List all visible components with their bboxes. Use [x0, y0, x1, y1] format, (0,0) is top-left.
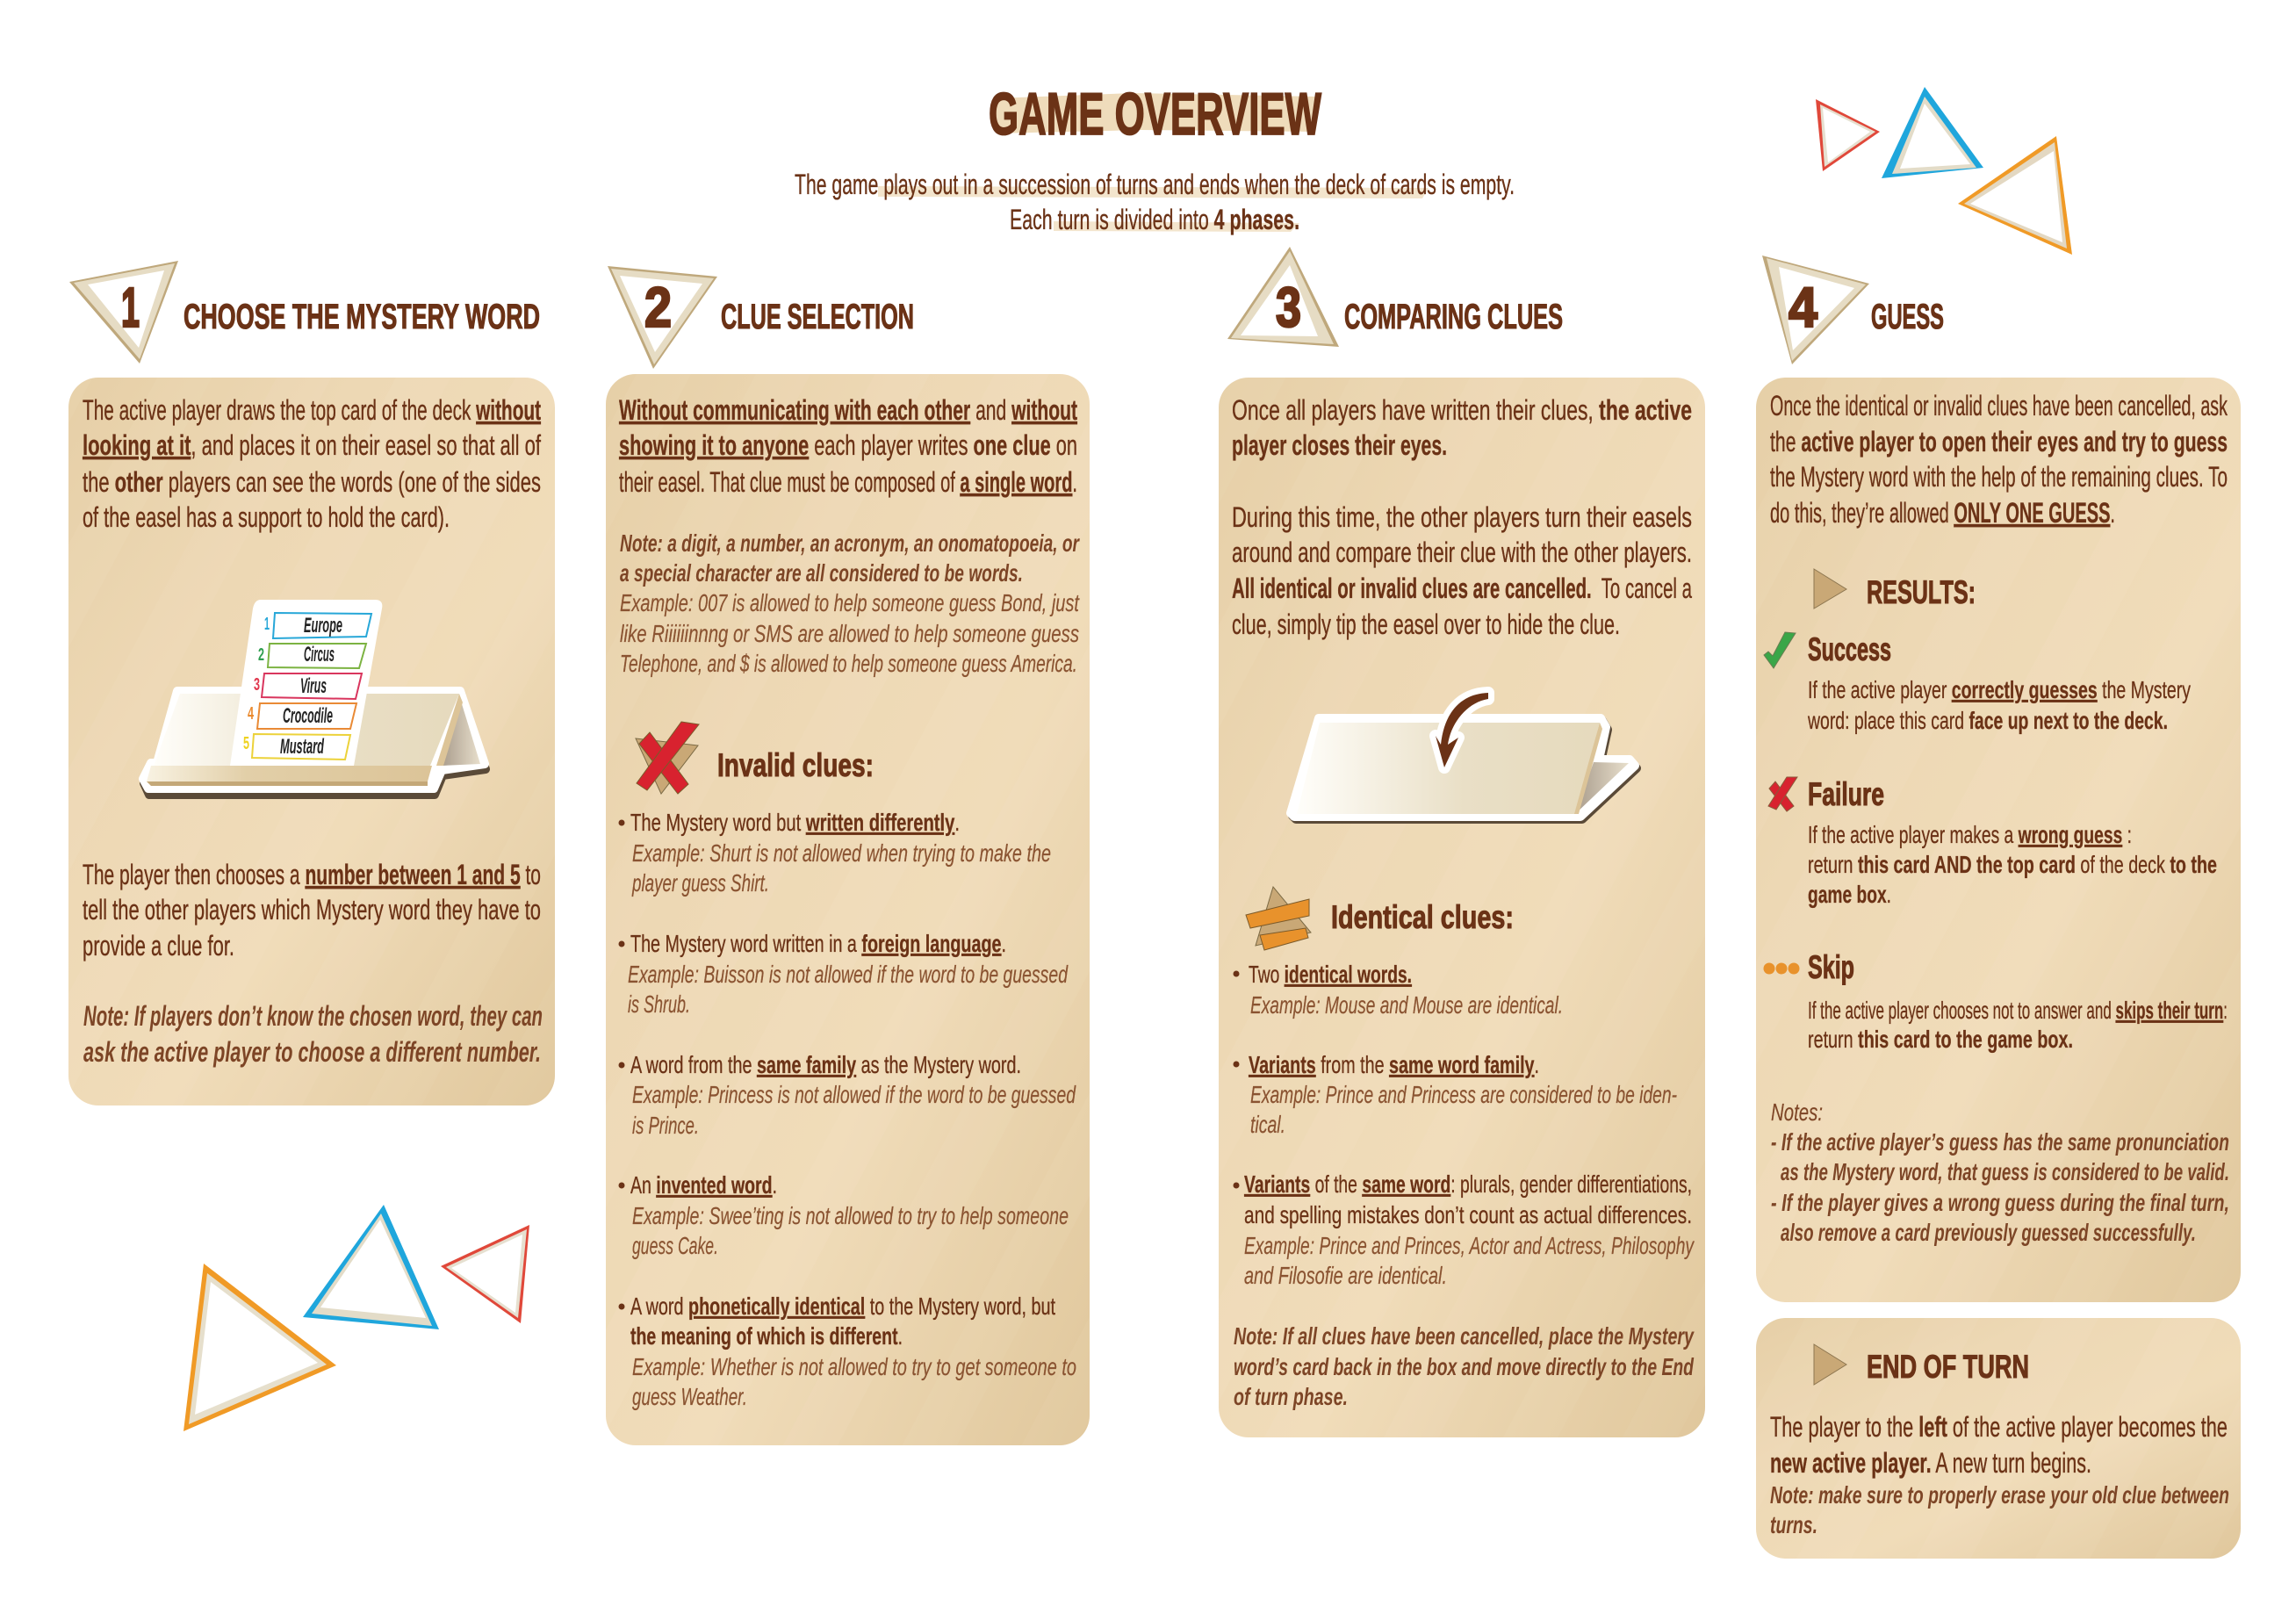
list: invalid clue types: Example: Princess is not allowed if the word to be guessed — [632, 1081, 1076, 1108]
list: invalid clue types: Example: Whether is not allowed to try to get someone to — [632, 1353, 1076, 1380]
list: identical clue types: Variants of the same word: plurals, gender differentiations, — [1244, 1170, 1692, 1198]
list: invalid clue types: A word from the same family as the Mystery word. — [630, 1051, 1021, 1078]
number paragraph — [83, 859, 541, 961]
note and example: Example: 007 is allowed to help someone guess Bond, just — [620, 589, 1080, 616]
step 1 heading — [69, 261, 540, 364]
heading: clue selection: CLUE SELECTION — [721, 298, 914, 336]
note and example: like Riiiiiinnng or SMS are allowed to help someone guess — [620, 620, 1079, 647]
note: ask the active player to choose a different number. — [83, 1036, 541, 1068]
step 2 heading — [608, 266, 914, 369]
result: failure: game box. — [1808, 881, 1891, 908]
result: skip: Skip — [1808, 949, 1854, 985]
result: success: Success — [1808, 631, 1891, 667]
illustration: easel with card: Virus — [300, 674, 327, 698]
intro paragraph: of the easel has a support to hold the card). — [83, 501, 450, 533]
illustration: easel with card: Europe — [304, 614, 342, 637]
intro paragraph: looking at it, and places it on their easel so that all of — [83, 429, 541, 461]
result: success: If the active player correctly guesses the Mystery — [1808, 676, 2191, 703]
illustration: easel with card: Circus — [304, 643, 335, 666]
icon: triangle with number 4 — [1762, 256, 1869, 364]
note: turns. — [1770, 1511, 1817, 1538]
list: invalid clue types — [618, 809, 1076, 1410]
note and example — [620, 529, 1080, 677]
note: Note: If all clues have been cancelled, place the Mystery — [1234, 1322, 1695, 1350]
icon: triangle with number 1: 1 — [121, 276, 140, 339]
result: failure: return this card AND the top card of the deck to the — [1808, 851, 2217, 878]
list: invalid clue types: Example: Swee’ting is not allowed to try to help someone — [632, 1202, 1069, 1229]
list: invalid clue types: is Prince. — [632, 1112, 699, 1139]
decorative triangles top right — [1816, 87, 2072, 255]
header — [795, 81, 1515, 235]
phases text: Each turn is divided into 4 phases. — [1010, 204, 1299, 235]
list: invalid clue types: An invented word. — [630, 1171, 777, 1199]
list: invalid clue types: guess Cake. — [632, 1232, 718, 1259]
number paragraph: The player then chooses a number between 1 and 5 to — [83, 859, 541, 890]
list: identical clue types — [1233, 961, 1695, 1289]
illustration: easel with card: Mustard — [280, 735, 325, 759]
illustration: tipped easel with arrow — [1291, 693, 1637, 819]
notes — [1771, 1098, 2229, 1246]
panel: step 4 — [1756, 378, 2241, 1302]
intro paragraph: their easel. That clue must be composed of a single word. — [619, 466, 1077, 498]
note: Note: If players don’t know the chosen word, they can — [83, 1000, 543, 1032]
heading: identical clues: Identical clues: — [1331, 899, 1514, 935]
illustration: easel with card: 4 — [248, 704, 255, 724]
list: identical clue types: Two identical words. — [1249, 961, 1412, 988]
paragraph — [1770, 1411, 2228, 1479]
number paragraph: provide a clue for. — [83, 930, 234, 961]
result: skip — [1763, 949, 2228, 1053]
icon: results arrow — [1814, 569, 1846, 609]
paragraph: compare clues: During this time, the other players turn their easels — [1232, 501, 1692, 533]
paragraph: compare clues: All identical or invalid clues are cancelled. To cancel a — [1232, 573, 1692, 604]
note: of turn phase. — [1234, 1383, 1348, 1410]
icon: triangle with number 2 — [608, 266, 717, 369]
number paragraph: tell the other players which Mystery word they have to — [83, 894, 541, 925]
icon: triangle with number 1 — [69, 261, 178, 364]
paragraph: new active player. A new turn begins. — [1770, 1447, 2091, 1479]
note and example: Note: a digit, a number, an acronym, an onomatopoeia, or — [620, 529, 1080, 557]
heading: results: RESULTS: — [1867, 574, 1976, 610]
list: invalid clue types: Example: Buisson is not allowed if the word to be guessed — [628, 961, 1069, 988]
result: skip: return this card to the game box. — [1808, 1026, 2073, 1053]
card — [230, 600, 382, 766]
icon: identical clues — [1246, 887, 1311, 950]
result: success — [1764, 631, 2191, 734]
list: invalid clue types: player guess Shirt. — [631, 869, 769, 897]
icon: invalid cross — [636, 722, 699, 794]
icon: triangle with number 3: 3 — [1276, 276, 1301, 339]
note — [1234, 1322, 1695, 1410]
result: failure: Failure — [1808, 776, 1884, 812]
intro text: The game plays out in a succession of turns and ends when the deck of cards is empty. — [795, 169, 1515, 200]
heading: guess: GUESS — [1871, 298, 1944, 336]
title: GAME OVERVIEW — [989, 81, 1322, 148]
result: success: word: place this card face up next to the deck. — [1807, 707, 2168, 734]
title highlight — [995, 93, 1317, 133]
panel: step 1 — [68, 378, 555, 1105]
panel: end of turn — [1756, 1318, 2241, 1559]
illustration: easel with card: 3 — [254, 675, 260, 695]
illustration: easel with card — [143, 600, 486, 795]
list: invalid clue types: The Mystery word written in a foreign language. — [630, 930, 1006, 957]
decorative triangles bottom left — [184, 1205, 529, 1431]
list: invalid clue types: A word phonetically identical to the Mystery word, but — [630, 1293, 1055, 1320]
illustration: easel with card: 1 — [264, 615, 270, 634]
heading: comparing clues: COMPARING CLUES — [1344, 298, 1563, 336]
intro paragraph: do this, they’re allowed ONLY ONE GUESS. — [1770, 497, 2115, 529]
list: identical clue types: Example: Prince and Princes, Actor and Actress, Philosophy — [1244, 1232, 1695, 1259]
list: identical clue types: and spelling mistakes don’t count as actual differences. — [1244, 1201, 1692, 1228]
icon: triangle with number 3 — [1227, 247, 1339, 347]
result: failure: If the active player makes a wrong guess : — [1808, 821, 2132, 848]
intro paragraph — [1770, 390, 2228, 529]
intro paragraph: The active player draws the top card of the deck without — [83, 394, 541, 426]
illustration: easel with card: 2 — [258, 645, 264, 665]
list: invalid clue types: guess Weather. — [632, 1383, 747, 1410]
icon: triangle with number 2: 2 — [644, 276, 672, 339]
intro paragraph: showing it to anyone each player writes one clue on — [619, 429, 1077, 461]
list: identical clue types: Example: Prince and Princess are considered to be iden- — [1250, 1081, 1677, 1108]
intro paragraph — [619, 394, 1077, 498]
note — [1770, 1481, 2229, 1538]
result: skip: If the active player chooses not to answer and skips their turn: — [1808, 997, 2228, 1024]
list: identical clue types: and Filosofie are identical. — [1244, 1262, 1447, 1289]
panel: step 3 — [1219, 378, 1705, 1437]
icon: triangle with number 4: 4 — [1789, 276, 1817, 339]
heading: invalid clues: Invalid clues: — [717, 747, 874, 783]
step 4 heading — [1762, 256, 1944, 364]
paragraph: eyes closed — [1232, 394, 1692, 461]
intro paragraph: Without communicating with each other and without — [619, 394, 1077, 426]
list: invalid clue types: is Shrub. — [628, 990, 690, 1018]
notes: Notes: — [1771, 1098, 1823, 1126]
result: failure — [1768, 776, 2217, 908]
intro paragraph: the other players can see the words (one of the sides — [83, 466, 541, 498]
paragraph: eyes closed: Once all players have written their clues, the active — [1232, 394, 1692, 426]
illustration: easel with card: 5 — [243, 734, 249, 753]
note — [83, 1000, 543, 1068]
list: invalid clue types: Example: Shurt is not allowed when trying to make the — [632, 839, 1051, 867]
step 3 heading — [1227, 247, 1563, 347]
list: identical clue types: tical. — [1250, 1111, 1285, 1138]
paragraph: compare clues — [1232, 501, 1692, 640]
heading: choose the mystery word: CHOOSE THE MYSTERY WORD — [184, 298, 540, 336]
panel: step 2 — [606, 374, 1090, 1445]
intro paragraph — [83, 394, 541, 533]
list: invalid clue types: The Mystery word but written differently. — [630, 809, 960, 836]
list: identical clue types: Example: Mouse and Mouse are identical. — [1250, 991, 1563, 1019]
illustration: easel with card: Crocodile — [283, 704, 333, 728]
icon: end of turn arrow — [1814, 1344, 1846, 1385]
paragraph: eyes closed: player closes their eyes. — [1232, 429, 1447, 461]
list: identical clue types: Variants from the same word family. — [1249, 1051, 1539, 1078]
subtitle highlight — [878, 186, 1429, 232]
heading: end of turn: END OF TURN — [1867, 1349, 2029, 1385]
note and example: Telephone, and $ is allowed to help someone guess America. — [620, 650, 1077, 677]
note and example: a special character are all considered to be words. — [620, 559, 1023, 587]
paragraph: compare clues: around and compare their clue with the other players. — [1232, 537, 1692, 568]
paragraph: compare clues: clue, simply tip the easel over to hide the clue. — [1232, 609, 1620, 640]
note: word’s card back in the box and move directly to the End — [1234, 1353, 1695, 1380]
list: invalid clue types: the meaning of which is different. — [630, 1322, 903, 1350]
